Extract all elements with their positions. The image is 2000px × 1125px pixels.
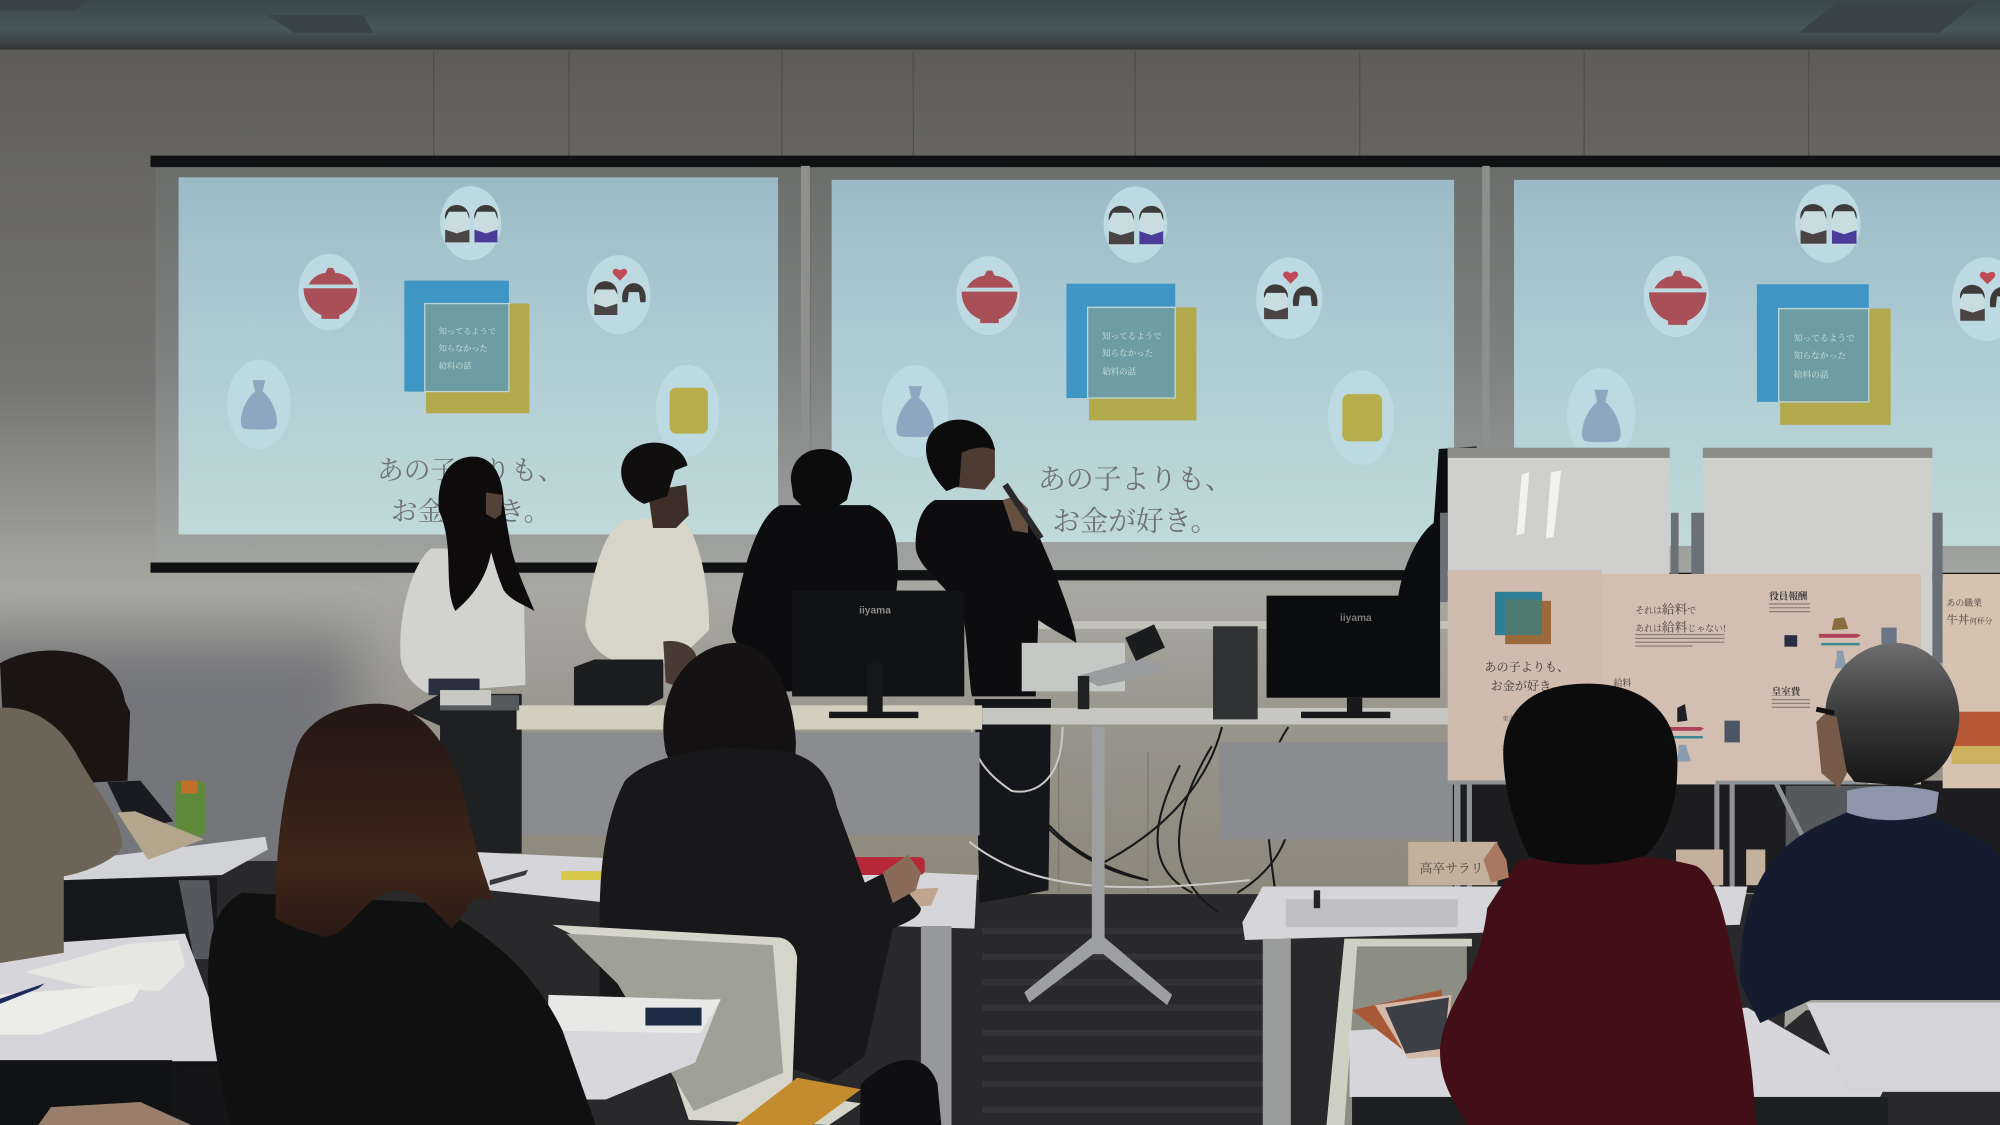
screen 1 [156, 163, 801, 566]
whiteboard 2 [1703, 448, 1932, 659]
monitor 1: iiyama [859, 606, 891, 617]
screen housing bars [151, 156, 2000, 582]
front tables and audience [0, 643, 2000, 1125]
audience left [0, 650, 205, 963]
presenter 2 [585, 443, 709, 690]
audience woman red sweater [1352, 684, 1755, 1125]
table tops [440, 695, 1454, 730]
left poster [1448, 570, 1602, 781]
whiteboard 1 [1448, 448, 1670, 577]
monitor 2: iiyama [1340, 613, 1372, 624]
front right table [1806, 1003, 2000, 1092]
left poster: お金が好き。 [1491, 678, 1563, 693]
audience woman long hair [208, 704, 596, 1125]
presenter 1 [400, 457, 534, 695]
cables behind [810, 714, 1291, 912]
presenter 5 behind boards [1398, 446, 1477, 599]
left poster: あの子よりも、 [1484, 660, 1569, 674]
floor [0, 861, 2000, 1125]
screen 2 [811, 163, 1482, 574]
tablet person table [1349, 1008, 1888, 1125]
middle table [474, 852, 977, 1125]
name cards [1408, 842, 1765, 885]
monitor 1 [792, 591, 964, 718]
area behind posters [1453, 781, 2000, 893]
right poster: 役員報酬 [1769, 590, 1808, 602]
left poster: 東海大学上川 [1503, 714, 1541, 723]
laptop arm monitor [1022, 624, 1165, 709]
floor carpet stripes [982, 931, 1276, 1110]
middle chair [552, 925, 861, 1125]
right poster: 皇室費 [1772, 686, 1802, 698]
wall [0, 50, 2000, 944]
dark cabinet [408, 694, 522, 853]
right poster: 給料 [1614, 677, 1631, 688]
left poster: 数学上 [1509, 728, 1529, 737]
poster stand legs [1448, 781, 1869, 886]
black bag [574, 659, 663, 705]
right poster: あれは給料じゃない! [1635, 619, 1726, 634]
back tables and monitors [408, 591, 1454, 1005]
left poster: デザイン [1501, 743, 1526, 751]
audience woman dark jacket [599, 643, 921, 1082]
front left tables [0, 934, 721, 1125]
far right poster [1943, 574, 2000, 788]
far right poster: 牛丼何杯分 [1946, 613, 1993, 627]
tripod stand [1024, 727, 1172, 1005]
grey modesty panels [520, 732, 1454, 839]
floor bag [860, 1060, 941, 1125]
projection screens [151, 156, 2000, 582]
chair right [1784, 962, 2000, 1028]
poster boards [1408, 448, 2000, 893]
name cards: 高卒サラリ [1420, 860, 1483, 875]
back right table [1242, 886, 1747, 1125]
right poster [1602, 574, 1921, 784]
books on cabinet [440, 690, 491, 705]
ceiling vents [0, 0, 1977, 33]
monitor 2 [1267, 596, 1440, 718]
right poster: それは給料で [1635, 602, 1696, 617]
ceiling [0, 0, 2000, 50]
presenter 3 [732, 449, 898, 691]
left table [54, 837, 268, 959]
audience man gray hair [1740, 643, 2000, 1023]
chair right centre [1327, 939, 1467, 1125]
screen 3 [1490, 163, 2000, 577]
computer tower [1213, 626, 1258, 719]
presenter 4 with microphone [916, 420, 1077, 903]
far right poster: あの職業 [1946, 597, 1982, 608]
